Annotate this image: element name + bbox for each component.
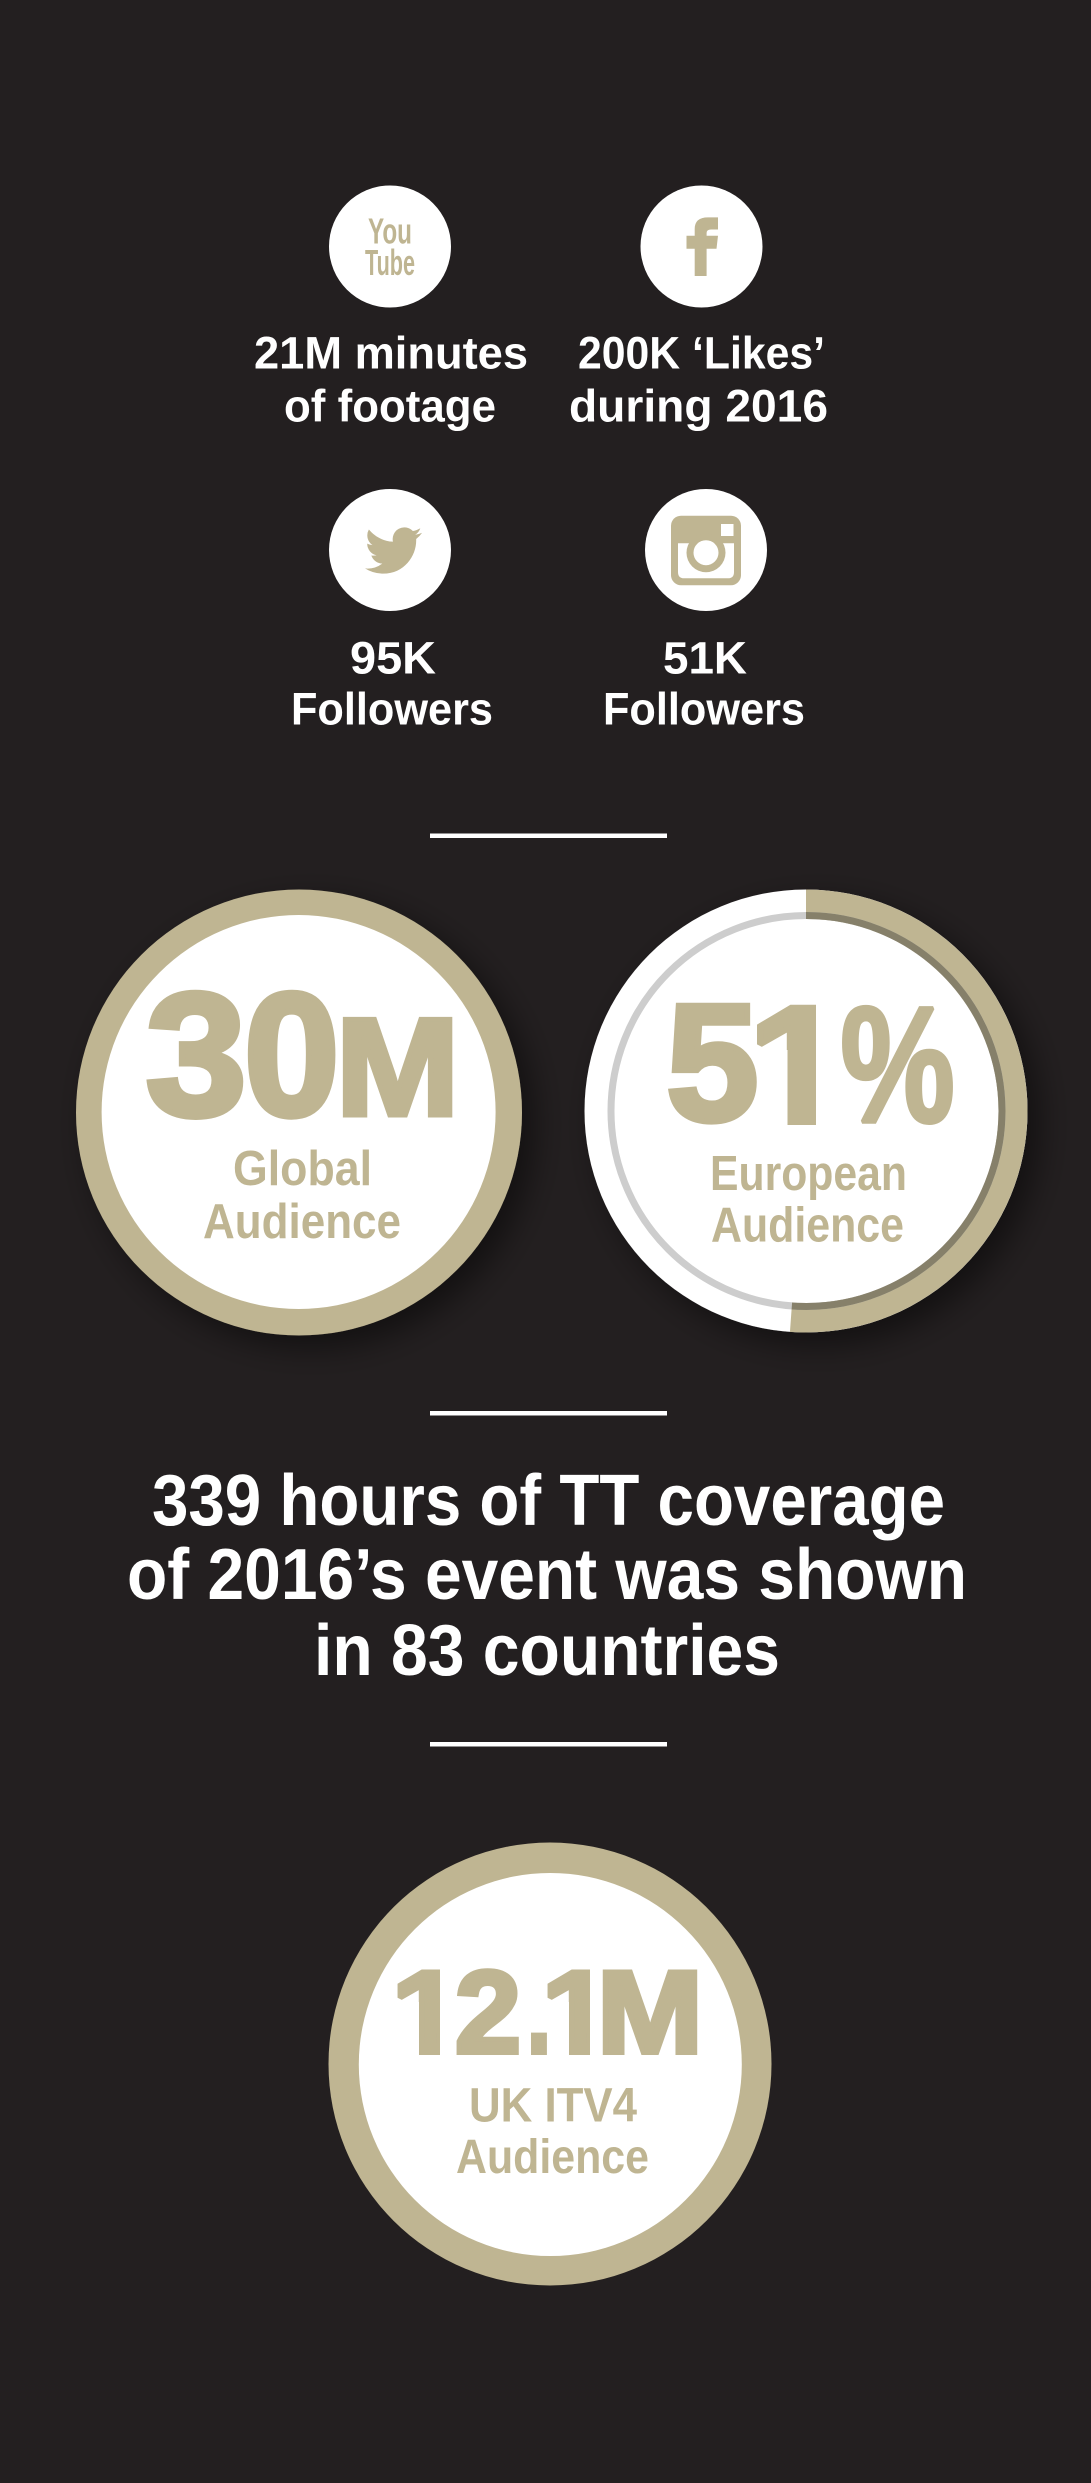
number: 30M: 3 [146,958,247,1153]
label: Global Audience [203,1142,401,1249]
stat: YouTube [254,186,528,432]
number: 12.1M: . [527,1946,551,2078]
icon: Twitter [329,489,451,611]
icon: Instagram [645,489,767,611]
icon: YouTube: Tube [365,242,415,283]
number: 51%: 5 [666,971,758,1156]
label: European Audience [710,1147,907,1252]
label: UK ITV4 Audience [456,2080,649,2184]
text: TT coverage statement: of 2016’s event was shown [127,1535,967,1615]
number: 12.1M: 1 [392,1946,463,2078]
ring: global audience [76,890,522,1336]
text: TT coverage statement: 339 hours of TT coverage [152,1461,945,1541]
number: 12.1M: 1 [542,1946,613,2078]
stat: Twitter [291,489,493,734]
panel: social media stats [254,186,828,734]
text: TT coverage statement: in 83 countries [314,1611,780,1691]
text: 21M minutes of footage: 21M minutes [254,328,528,378]
pie ring: 51 percent [584,890,1028,1332]
label: Global Audience: Global [233,1142,372,1196]
text: 51K Followers [603,632,805,734]
text: 95K Followers: Followers [291,684,493,734]
label: UK ITV4 Audience: UK ITV4 [469,2080,637,2132]
text: 51K Followers: Followers [603,684,805,734]
text: TT coverage statement [127,1461,967,1691]
number: 30M: M [336,990,460,1145]
text: 51K Followers: 51K [663,632,747,684]
number: 51% [668,1002,953,1125]
panel: 30M global audience [76,890,522,1336]
number: 12.1M: 2 [455,1946,521,2078]
icon: YouTube [329,186,451,308]
text: 21M minutes of footage [254,328,528,432]
text: 21M minutes of footage: of footage [284,380,496,432]
text: 200K Likes during 2016: during 2016 [569,380,828,432]
text: 200K Likes during 2016 [569,328,828,432]
ring: UK ITV4 audience [328,1842,772,2286]
stat: Facebook [569,186,828,432]
text: 95K Followers [291,632,493,734]
infographic canvas [76,186,1039,2286]
label: European Audience: European [710,1147,907,1201]
number: 30M [146,958,460,1153]
label: European Audience: Audience [711,1198,904,1252]
label: Global Audience: Audience [203,1195,401,1249]
icon: Facebook [640,186,762,308]
text: 200K Likes during 2016: 200K ‘Likes’ [578,328,825,378]
label: UK ITV4 Audience: Audience [456,2131,649,2184]
number: 12.1M: M [597,1946,703,2078]
number: 51%: 1 [748,973,849,1158]
stat: Instagram [603,489,805,734]
panel: 51% European audience [584,890,1028,1332]
number: 12.1M [398,1968,698,2055]
number: 51%: % [840,973,955,1157]
text: 95K Followers: 95K [350,632,437,684]
icon: YouTube: You [368,210,412,252]
panel: 12.1M UK ITV4 audience [328,1842,772,2286]
number: 30M: 0 [244,958,340,1153]
